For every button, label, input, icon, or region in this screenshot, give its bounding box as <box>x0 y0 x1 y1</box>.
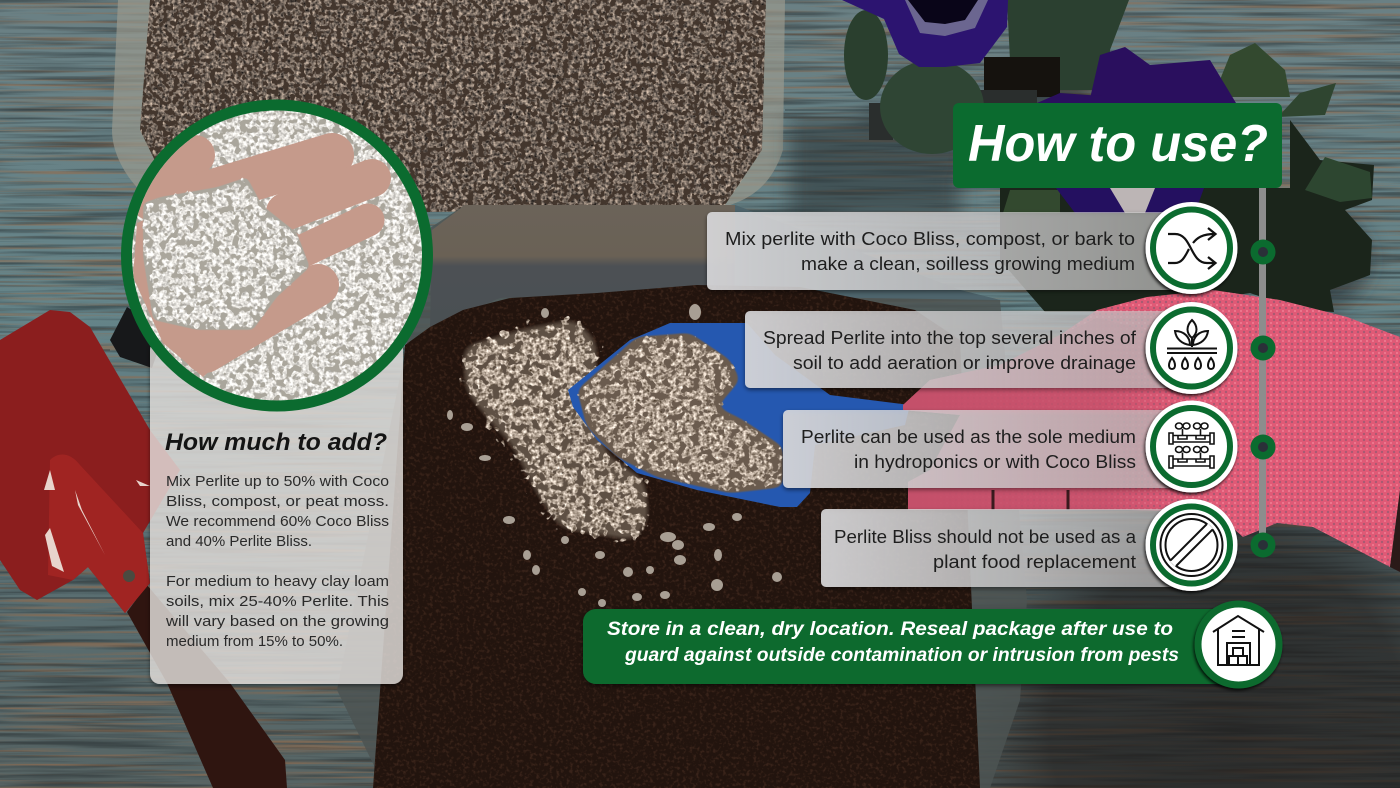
bottom clear tray <box>337 205 1027 788</box>
text block: mix ratios <box>165 474 389 650</box>
icon: hydroponic pipes <box>1146 400 1238 492</box>
blue scoop <box>568 323 910 507</box>
step 4: not plant food: plant food replacement <box>933 552 1136 572</box>
step 1: mix: Mix perlite with Coco Bliss, compost, or bark to <box>725 229 1135 249</box>
panel: how much to add <box>150 340 403 684</box>
text block: mix ratios: For medium to heavy clay loam <box>166 574 389 590</box>
step 4: not plant food: Perlite Bliss should not be used as a <box>834 527 1137 547</box>
icon: warehouse <box>1194 600 1282 688</box>
step 2: spread: Spread Perlite into the top several inches of <box>763 328 1137 348</box>
icon: shuffle arrows <box>1146 202 1238 294</box>
dot 4 <box>1250 532 1276 558</box>
icon: plant over soil with drops <box>1146 302 1238 394</box>
pink glove <box>903 290 1400 572</box>
step 3: hydroponics: in hydroponics or with Coco Bliss <box>854 452 1136 472</box>
step 2: spread: soil to add aeration or improve drainage <box>793 353 1136 373</box>
text block: mix ratios: We recommend 60% Coco Bliss <box>166 514 389 530</box>
icon: prohibited sign <box>1146 499 1238 591</box>
text block: mix ratios: will vary based on the growing <box>165 614 389 630</box>
flowers and leaves, top right <box>842 0 1336 154</box>
photo circle: hand holding perlite <box>121 100 433 412</box>
title: how to use <box>953 103 1282 188</box>
step 2: spread <box>745 302 1238 394</box>
text block: mix ratios: Mix Perlite up to 50% with Coco <box>166 474 389 490</box>
hand <box>133 155 372 377</box>
step 3: hydroponics <box>783 400 1238 492</box>
plant behind title <box>1000 120 1374 312</box>
storage banner: Store in a clean, dry location. Reseal package after use to <box>607 618 1173 640</box>
step 4: not plant food <box>821 499 1238 591</box>
text block: mix ratios: medium from 15% to 50%. <box>166 634 343 650</box>
heading: how much to add: How much to add? <box>165 429 387 456</box>
top tray of perlite gravel <box>112 0 785 215</box>
perlite on scoop <box>577 333 783 493</box>
step 3: hydroponics: Perlite can be used as the sole medium <box>801 427 1136 447</box>
dot 3 <box>1250 434 1276 460</box>
dark handled object behind panel <box>110 307 165 368</box>
text block: mix ratios: Bliss, compost, or peat moss. <box>166 494 389 510</box>
step 1: mix: make a clean, soilless growing medium <box>801 254 1135 274</box>
soft shadow around plants <box>790 70 1370 310</box>
dot 2 <box>1250 336 1276 360</box>
storage banner: guard against outside contamination or intrusion from pests <box>624 644 1179 666</box>
red trowel <box>0 310 287 788</box>
text block: mix ratios: soils, mix 25-40% Perlite. This <box>166 594 389 610</box>
step 1: mix <box>707 202 1238 294</box>
scattered perlite on soil <box>447 304 782 607</box>
text block: mix ratios: and 40% Perlite Bliss. <box>166 534 312 550</box>
title: how to use: How to use? <box>968 115 1268 173</box>
storage banner <box>583 600 1282 688</box>
dot 1 <box>1250 240 1276 264</box>
soil <box>370 280 985 788</box>
connector line with dots <box>1250 188 1276 558</box>
